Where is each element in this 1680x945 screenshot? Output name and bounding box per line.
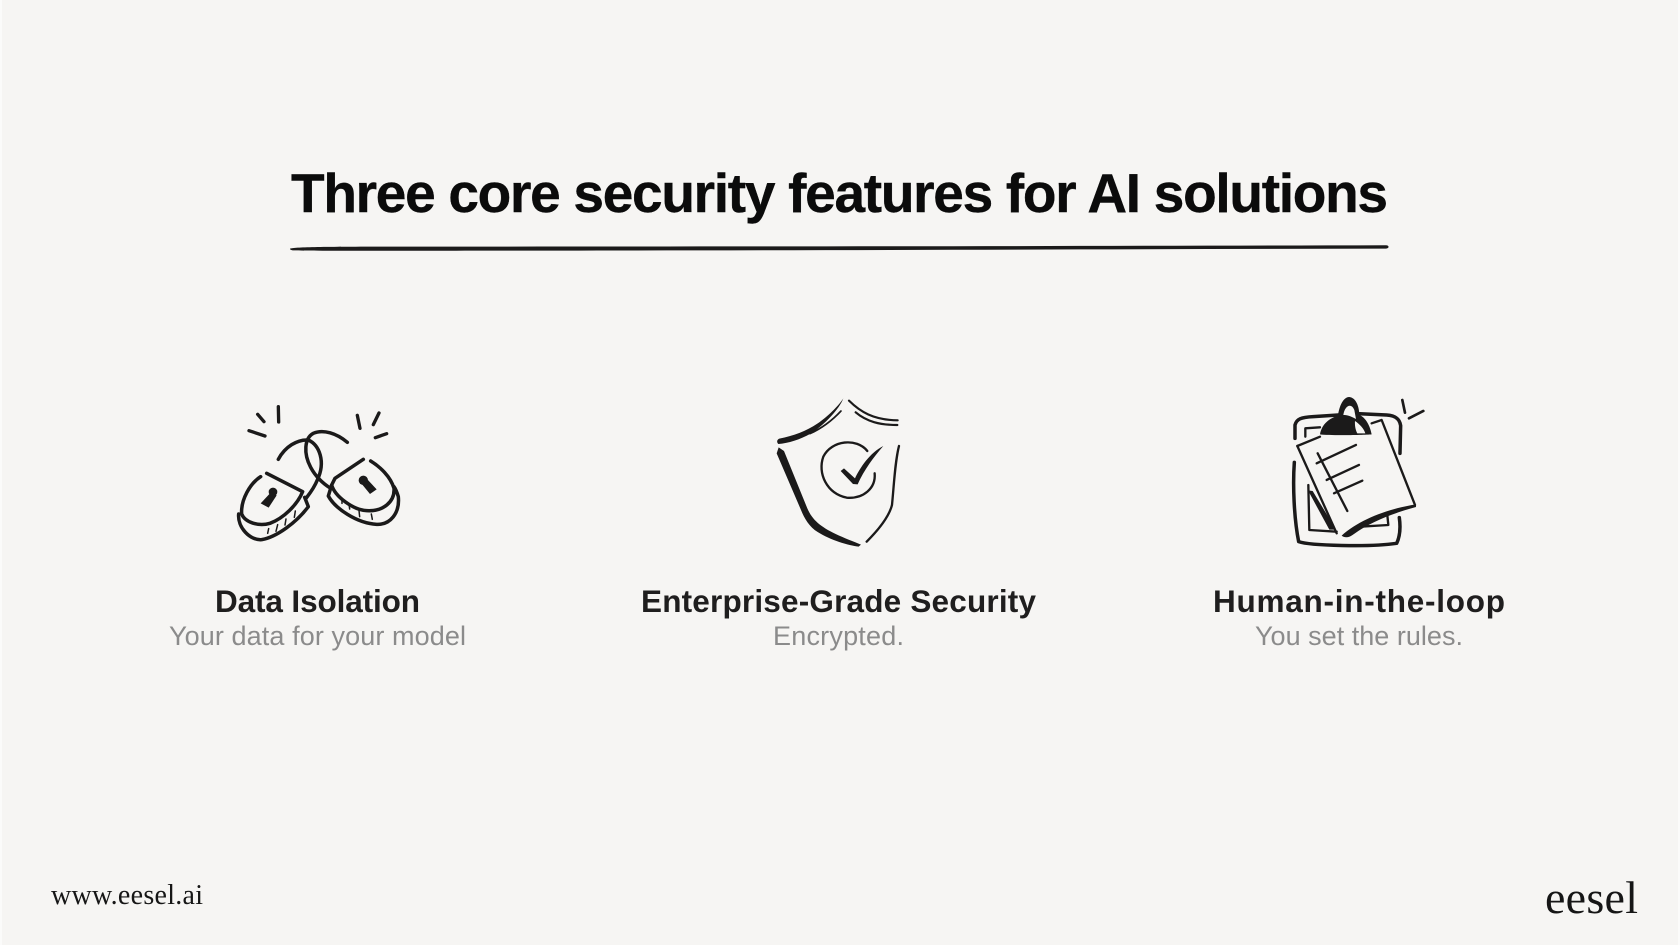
description: enterprise-grade security: Encrypted. bbox=[773, 621, 904, 651]
panel: data isolation bbox=[169, 407, 466, 651]
icon: clipboard with paper bbox=[1294, 397, 1423, 546]
heading: data isolation: Data Isolation bbox=[215, 583, 420, 619]
footer logo wordmark: eesel bbox=[1545, 872, 1638, 923]
panel: human-in-the-loop bbox=[1213, 397, 1505, 651]
heading: enterprise-grade security: Enterprise-Grade Security bbox=[641, 583, 1036, 619]
panel: enterprise-grade security bbox=[641, 398, 1036, 651]
description: human-in-the-loop: You set the rules. bbox=[1255, 621, 1463, 651]
icon: shield with check bbox=[777, 398, 899, 547]
description: data isolation: Your data for your model bbox=[169, 621, 466, 651]
title: Three core security features for AI solutions bbox=[291, 162, 1388, 224]
footer website url: www.eesel.ai bbox=[51, 880, 203, 911]
title underline bbox=[290, 245, 1389, 251]
icon: two linked padlocks bbox=[239, 407, 398, 540]
heading: human-in-the-loop: Human-in-the-loop bbox=[1213, 583, 1505, 619]
